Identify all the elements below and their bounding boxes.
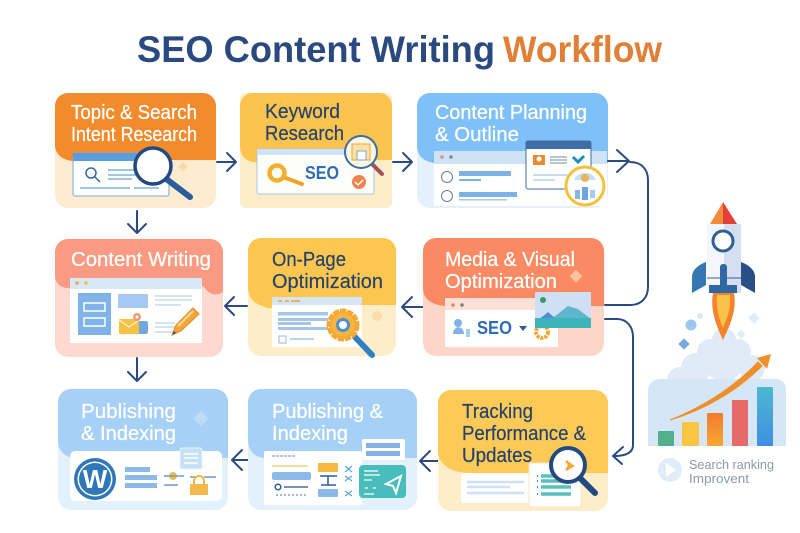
heading: Keyword Research (265, 101, 344, 145)
heading: Tracking Performance and Updates (462, 401, 587, 467)
bar chart: search ranking (648, 354, 786, 446)
heading: Media and Visual Optimization: Media & Visual (445, 249, 575, 271)
caption: search ranking (689, 457, 774, 486)
SEO label: SEO (477, 318, 512, 338)
heading: Content Planning and Outline: Content Planning (435, 102, 587, 124)
icon: magnifier (551, 448, 595, 493)
body (707, 224, 741, 293)
publish window (70, 451, 222, 501)
icon: lock (190, 476, 208, 495)
arrow: step 3 connector to step 6 (605, 150, 648, 305)
base (709, 285, 737, 293)
icon: orange wheel (536, 326, 548, 338)
heading: Publishing and Indexing: & Indexing (81, 423, 176, 445)
heading: Tracking Performance and Updates: Updates (462, 445, 532, 467)
icon: small marker (519, 326, 527, 331)
heading: Content Planning and Outline (435, 102, 587, 146)
checklist window (264, 451, 362, 505)
smoke cloud (667, 312, 765, 393)
heading: Keyword Research: Research (265, 123, 344, 145)
arrow: step 6 to 5 (402, 297, 426, 317)
arrow: step 5 to 4 (225, 297, 247, 315)
media window (445, 298, 558, 347)
growth arrow (670, 354, 771, 420)
panel: On-Page Optimization (248, 238, 396, 356)
icon: play badge (658, 458, 682, 482)
heading: On-Page Optimization: On-Page (272, 249, 346, 271)
heading: On-Page Optimization: Optimization (272, 271, 383, 293)
icon: document (180, 448, 202, 469)
panel: Media and Visual Optimization (423, 238, 604, 356)
image thumbnail (535, 292, 591, 328)
icon: WordPress logo: W (83, 464, 108, 494)
heading: Topic and Search Intent Research: Intent Research (71, 124, 197, 146)
heading: Content Planning and Outline: & Outline (435, 124, 519, 146)
heading: Topic and Search Intent Research (71, 102, 197, 146)
arrow: step 4 to 7 (128, 358, 146, 381)
icon: check badge (352, 175, 366, 189)
small card (362, 439, 405, 460)
icon: small magnifier (345, 136, 382, 174)
heading: Publishing and Indexing (272, 401, 384, 445)
optimization window (272, 297, 362, 347)
heading: Tracking Performance and Updates: Tracking (462, 401, 533, 423)
arrow: step 8 to 7 (232, 450, 248, 470)
heading: Publishing and Indexing (81, 401, 176, 445)
browser window (73, 153, 169, 196)
panel: Topic and Search Intent Research (55, 93, 216, 208)
panel: Content Planning and Outline (417, 93, 608, 208)
flame (712, 293, 735, 340)
teal send card (359, 465, 406, 498)
arrow: step 1 to 4 (128, 211, 146, 233)
icon: rocket launch (667, 202, 765, 393)
browser window (257, 149, 374, 194)
icon: key (270, 166, 302, 184)
panel: Publishing and Indexing WordPress (58, 389, 228, 510)
icon: magnifier (135, 148, 190, 197)
arrow: step 2 to 3 (393, 153, 412, 171)
caption: search ranking: Search ranking (689, 457, 774, 472)
writing window (70, 278, 202, 343)
heading: Topic and Search Intent Research: Topic & Search (71, 102, 197, 124)
fins (692, 262, 706, 293)
heading: Media and Visual Optimization (445, 249, 575, 293)
caption: search ranking: Improvent (689, 471, 749, 486)
title (137, 29, 662, 70)
panel: Tracking Performance and Updates (438, 390, 608, 511)
overlay card (526, 141, 591, 189)
icon: WordPress logo (74, 458, 116, 500)
panel: Publishing and Indexing checklist (248, 389, 417, 510)
heading: Content Writing: Content Writing (71, 249, 211, 271)
icon: yellow chart badge (566, 167, 604, 205)
right document (529, 463, 581, 507)
title: SEO Content Writing (137, 29, 495, 70)
heading: Media and Visual Optimization: Optimization (445, 271, 557, 293)
SEO label: SEO (305, 163, 339, 183)
arrow: step 1 to 2 (217, 153, 236, 171)
heading: Publishing and Indexing: Publishing (81, 401, 176, 423)
panel: Content Writing (55, 239, 223, 357)
heading: Publishing and Indexing: Indexing (272, 423, 348, 445)
arrow: step 9 to 8 (420, 451, 455, 471)
arrow: step 6 connector to step 9 (605, 319, 633, 464)
heading: Keyword Research: Keyword (265, 101, 340, 123)
panel: Keyword Research (240, 93, 392, 208)
heading: Tracking Performance and Updates: Performance & (462, 423, 587, 445)
porthole (713, 231, 733, 251)
heading: On-Page Optimization (272, 249, 383, 293)
nose cone (710, 202, 724, 224)
outline window (434, 151, 607, 206)
left document (461, 473, 530, 503)
icon: gear magnifier (329, 311, 372, 355)
heading: Publishing and Indexing: Publishing & (272, 401, 384, 423)
icon: pencil (172, 308, 199, 335)
icon: envelope (119, 313, 148, 334)
title: Workflow (503, 29, 662, 70)
